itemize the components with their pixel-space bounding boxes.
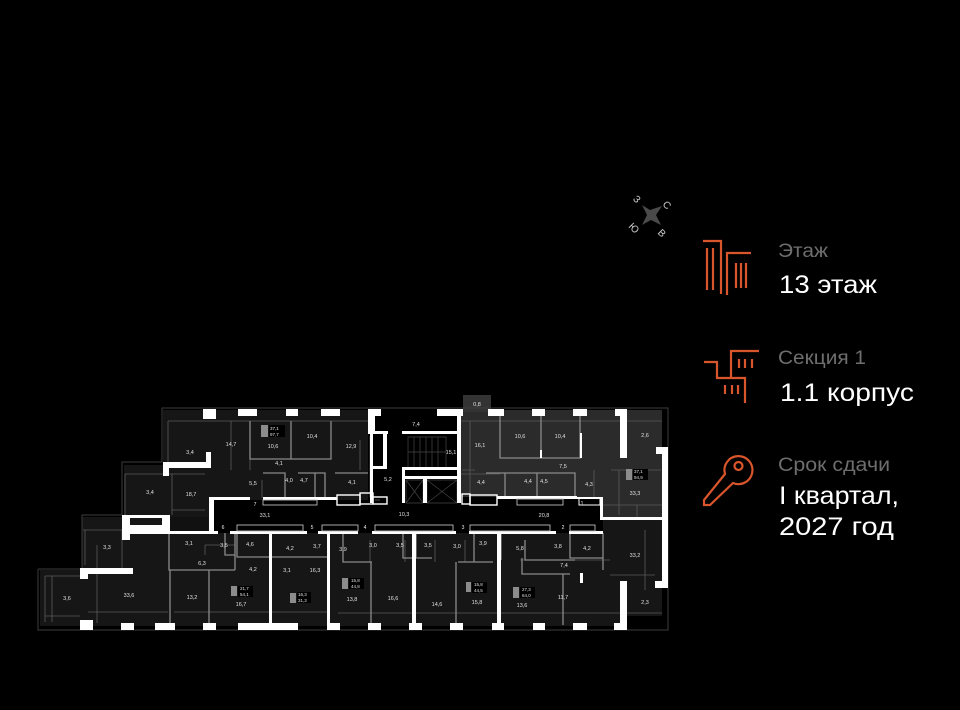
room areas: 18,7 xyxy=(186,492,196,498)
load-bearing walls xyxy=(80,409,668,630)
apartment badges: 15,8 xyxy=(351,578,360,583)
room areas: 4,2 xyxy=(583,546,591,552)
room areas: 33,1 xyxy=(260,513,270,519)
room areas: 0,8 xyxy=(473,402,481,408)
room areas: 3,5 xyxy=(424,543,432,549)
room areas: 4,7 xyxy=(300,478,308,484)
stair and lift core xyxy=(406,437,457,503)
room areas: 4,3 xyxy=(585,482,593,488)
room areas xyxy=(63,402,649,609)
compass: В xyxy=(655,227,668,240)
apartment badges: 44,8 xyxy=(351,584,360,589)
interior partitions xyxy=(169,416,603,625)
room areas: 4,0 xyxy=(285,478,293,484)
room areas: 3,6 xyxy=(63,596,71,602)
room areas: 4,4 xyxy=(524,479,532,485)
corridor door markers: 4 xyxy=(364,525,367,531)
room areas: 4,1 xyxy=(275,461,283,467)
room areas: 5,2 xyxy=(384,477,392,483)
room areas: 33,3 xyxy=(630,491,640,497)
room areas: 3,0 xyxy=(453,544,461,550)
compass: Ю xyxy=(626,221,641,236)
apartment badges: 31,3 xyxy=(298,598,307,603)
room areas: 3,9 xyxy=(479,541,487,547)
room areas: 10,4 xyxy=(555,434,565,440)
apartment badges: 64,0 xyxy=(522,593,531,598)
corridor door markers: 5 xyxy=(311,525,314,531)
dimension and partition lines xyxy=(45,421,662,623)
corridor door markers: 6 xyxy=(222,525,225,531)
room areas: 10,6 xyxy=(515,434,525,440)
section label: Секция 1 xyxy=(778,348,866,369)
room areas: 33,2 xyxy=(630,553,640,559)
room areas: 3,0 xyxy=(369,543,377,549)
apartment badges: 54,1 xyxy=(240,592,249,597)
room areas: 7,5 xyxy=(559,464,567,470)
room areas: 3,5 xyxy=(396,543,404,549)
outer outline xyxy=(38,408,668,630)
room areas: 3,4 xyxy=(146,490,154,496)
room areas: 4,4 xyxy=(477,480,485,486)
room areas: 4,1 xyxy=(348,480,356,486)
room areas: 14,6 xyxy=(432,602,442,608)
corridor door markers: 7 xyxy=(254,502,257,508)
corridor door markers: 1 xyxy=(581,501,584,507)
room areas: 7,4 xyxy=(412,422,420,428)
room areas: 11,7 xyxy=(558,595,568,601)
room areas: 16,6 xyxy=(388,596,398,602)
delivery value xyxy=(779,482,899,541)
apartment badges: 37,1 xyxy=(270,426,279,431)
room areas: 16,7 xyxy=(236,602,246,608)
compass: С xyxy=(660,199,673,212)
room areas: 13,6 xyxy=(517,603,527,609)
apartment badges: 27,3 xyxy=(522,587,531,592)
room areas: 3,8 xyxy=(554,544,562,550)
room areas: 10,6 xyxy=(268,444,278,450)
room areas: 4,2 xyxy=(286,546,294,552)
shaft boxes xyxy=(337,493,600,505)
room areas: 16,1 xyxy=(475,443,485,449)
compass: З xyxy=(630,194,642,206)
section value: 1.1 корпус xyxy=(780,379,914,407)
room areas: 10,4 xyxy=(307,434,317,440)
room areas: 3,7 xyxy=(313,544,321,550)
apartment badges xyxy=(231,425,648,603)
room areas: 33,6 xyxy=(124,593,134,599)
room areas: 2,6 xyxy=(641,433,649,439)
room areas: 12,9 xyxy=(346,444,356,450)
room areas: 16,3 xyxy=(310,568,320,574)
room areas: 3,4 xyxy=(186,450,194,456)
delivery label: Срок сдачи xyxy=(778,455,890,476)
room areas: 13,2 xyxy=(187,595,197,601)
room areas: 2,3 xyxy=(641,600,649,606)
room areas: 7,4 xyxy=(560,563,568,569)
corridor door markers: 3 xyxy=(462,525,465,531)
room areas: 5,8 xyxy=(516,546,524,552)
room areas: 5,5 xyxy=(249,481,257,487)
apartment badges: 37,1 xyxy=(634,469,643,474)
floor value: 13 этаж xyxy=(779,271,877,299)
icon: section xyxy=(704,351,759,403)
room areas: 10,3 xyxy=(399,512,409,518)
room areas: 4,6 xyxy=(246,542,254,548)
apartment floor areas xyxy=(40,395,662,626)
room areas: 20,8 xyxy=(539,513,549,519)
room areas: 13,8 xyxy=(347,597,357,603)
delivery value: I квартал, xyxy=(779,482,899,510)
room areas: 3,1 xyxy=(283,568,291,574)
delivery value: 2027 год xyxy=(779,513,894,541)
floor plan xyxy=(38,395,668,630)
room areas: 3,1 xyxy=(185,541,193,547)
room areas: 4,2 xyxy=(249,567,257,573)
room areas: 15,8 xyxy=(472,600,482,606)
apartment badges: 21,7 xyxy=(240,586,249,591)
apartment badges: 97,7 xyxy=(270,432,279,437)
room areas: 14,7 xyxy=(226,442,236,448)
apartment badges: 16,3 xyxy=(298,592,307,597)
corridor door markers: 2 xyxy=(562,525,565,531)
room areas: 3,9 xyxy=(339,547,347,553)
room areas: 3,5 xyxy=(220,543,228,549)
room areas: 3,3 xyxy=(103,545,111,551)
apartment badges: 44,5 xyxy=(474,588,483,593)
room areas: 6,3 xyxy=(198,561,206,567)
apartment badges: 94,9 xyxy=(634,475,643,480)
room areas: 15,1 xyxy=(446,450,456,456)
icon: floor xyxy=(703,241,751,295)
icon: key xyxy=(704,456,752,505)
floor label: Этаж xyxy=(778,241,828,262)
corridor door markers xyxy=(222,501,584,531)
room areas: 4,5 xyxy=(540,479,548,485)
apartment badges: 15,8 xyxy=(474,582,483,587)
compass xyxy=(626,194,673,240)
